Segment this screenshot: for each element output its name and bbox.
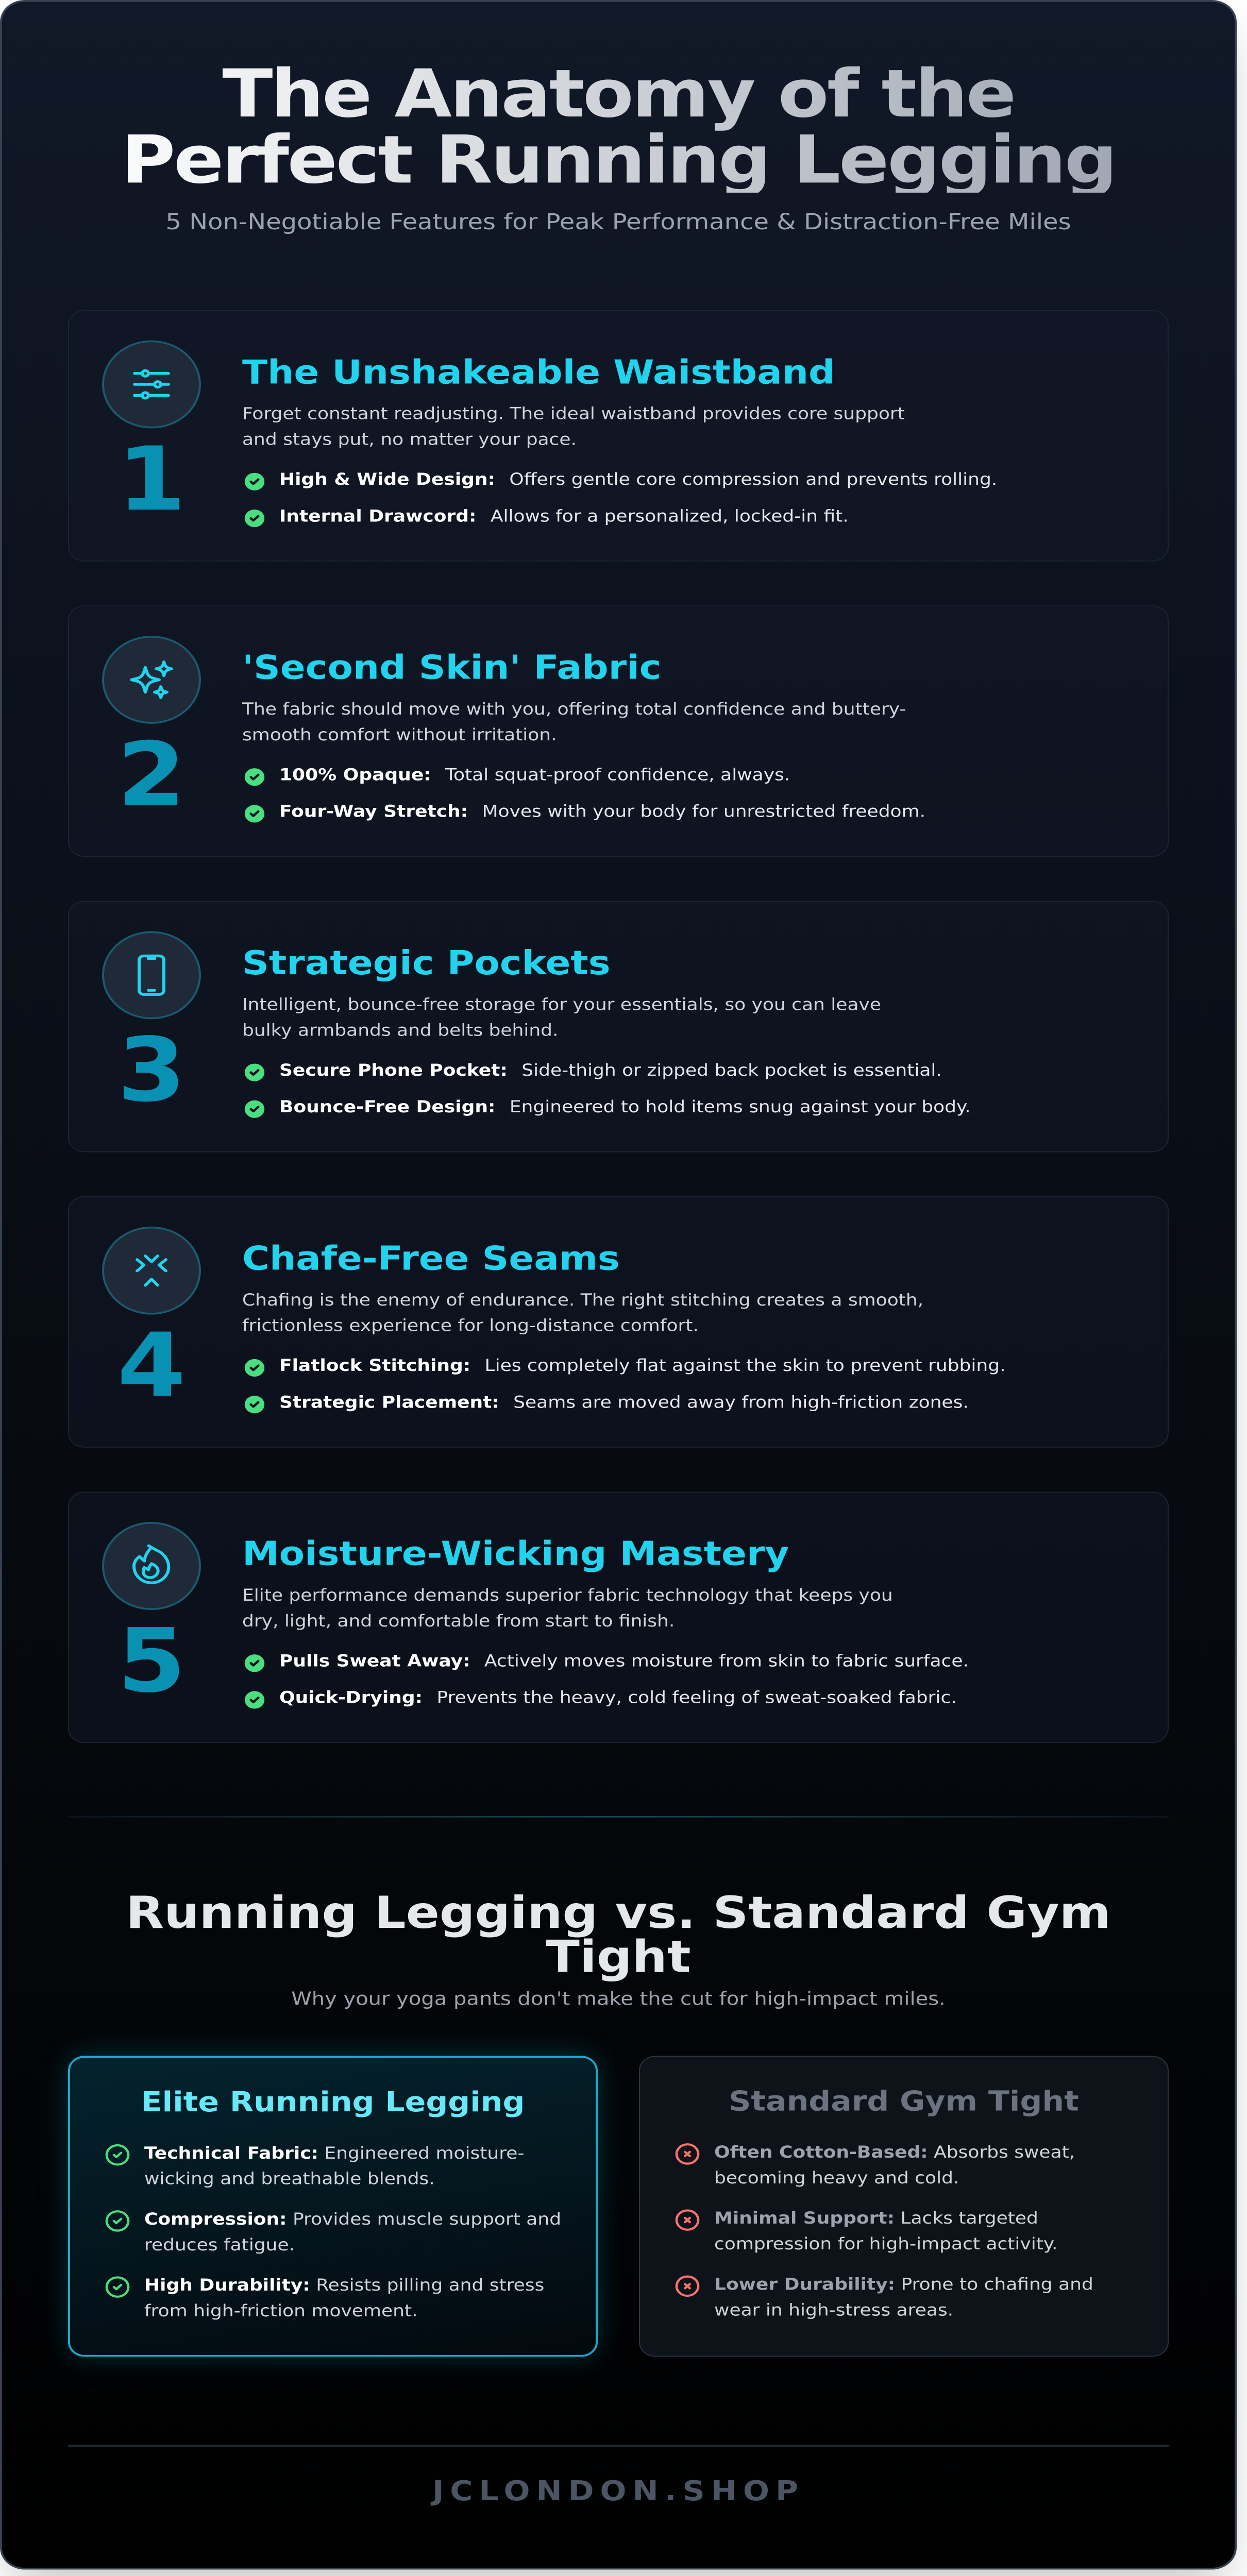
icon: check bbox=[244, 1359, 265, 1377]
heading: The Unshakeable Waistband bbox=[242, 353, 835, 391]
description: and stays put, no matter your pace. bbox=[242, 430, 577, 449]
number 1: 1 bbox=[117, 429, 186, 531]
number 2: 2 bbox=[117, 724, 186, 826]
heading: Strategic Pockets bbox=[242, 943, 611, 982]
description: frictionless experience for long-distance comfort. bbox=[242, 1316, 699, 1335]
panel heading: Standard Gym Tight bbox=[729, 2085, 1079, 2117]
item: technical fabric bbox=[144, 2141, 524, 2192]
icon badge: sparkles bbox=[102, 636, 201, 724]
item: compression bbox=[144, 2207, 561, 2258]
icon badge: inward chevrons bbox=[102, 1227, 201, 1315]
item: high durability: from high-friction movement. bbox=[144, 2302, 418, 2320]
number 5: 5 bbox=[117, 1610, 186, 1713]
number 4: 4 bbox=[117, 1315, 186, 1417]
icon: x outline bbox=[673, 2207, 702, 2233]
bullet: quick-drying: Quick-Drying: Prevents the heavy, cold feeling of sweat-soaked fabric. bbox=[279, 1688, 957, 1707]
description: The fabric should move with you, offering total confidence and buttery- bbox=[242, 700, 906, 719]
icon: check bbox=[244, 805, 265, 822]
comparison heading: Running Legging vs. Standard Gym bbox=[126, 1887, 1111, 1938]
item: minimal support: compression for high-impact activity. bbox=[714, 2235, 1057, 2253]
heading: Chafe-Free Seams bbox=[242, 1239, 620, 1278]
icon badge: sliders bbox=[102, 341, 201, 429]
description: Forget constant readjusting. The ideal waistband provides core support bbox=[242, 404, 905, 423]
description: Chafing is the enemy of endurance. The right stitching creates a smooth, bbox=[242, 1291, 923, 1310]
title: Perfect Running Legging bbox=[121, 121, 1116, 198]
panel: feature 1 waistband bbox=[68, 310, 1169, 562]
bullet: secure phone pocket: Secure Phone Pocket: Side-thigh or zipped back pocket is essential. bbox=[279, 1061, 942, 1080]
description: bulky armbands and belts behind. bbox=[242, 1021, 558, 1040]
panel: standard gym tight bbox=[639, 2056, 1169, 2357]
item: lower durability: Lower Durability: Prone to chafing and bbox=[714, 2275, 1093, 2294]
bullet: opaque: 100% Opaque: Total squat-proof confidence, always. bbox=[279, 766, 790, 784]
panel: feature 2 fabric bbox=[68, 605, 1169, 857]
icon: check bbox=[244, 1100, 265, 1118]
description: Elite performance demands superior fabric technology that keeps you bbox=[242, 1586, 893, 1605]
bullet: flatlock stitching: Flatlock Stitching: Lies completely flat against the skin to prevent rubbing. bbox=[279, 1357, 1006, 1375]
item: minimal support bbox=[714, 2206, 1057, 2257]
icon: x outline bbox=[673, 2273, 702, 2299]
icon: check bbox=[244, 510, 265, 528]
title: The Anatomy of the bbox=[222, 55, 1015, 132]
bullet: pulls sweat away: Pulls Sweat Away: Actively moves moisture from skin to fabric surface. bbox=[279, 1652, 969, 1671]
panel: feature 3 pockets bbox=[68, 901, 1169, 1152]
description: dry, light, and comfortable from start to finish. bbox=[242, 1612, 675, 1631]
number 3: 3 bbox=[117, 1019, 186, 1122]
bullet: four-way stretch: Four-Way Stretch: Moves with your body for unrestricted freedom. bbox=[279, 802, 925, 821]
comparison heading: Tight bbox=[546, 1931, 691, 1982]
item: high durability: High Durability: Resists pilling and stress bbox=[144, 2276, 544, 2295]
heading: Moisture-Wicking Mastery bbox=[242, 1534, 789, 1573]
heading: 'Second Skin' Fabric bbox=[242, 648, 661, 687]
item: technical fabric: Technical Fabric: Engineered moisture- bbox=[144, 2144, 524, 2163]
panel: feature 5 moisture bbox=[68, 1492, 1169, 1743]
icon: check outline bbox=[103, 2142, 132, 2168]
icon: x outline bbox=[673, 2141, 702, 2167]
description: Intelligent, bounce-free storage for your essentials, so you can leave bbox=[242, 995, 881, 1014]
icon: check bbox=[244, 473, 265, 490]
item: cotton-based bbox=[714, 2140, 1075, 2191]
bullet: strategic placement: Strategic Placement: Seams are moved away from high-friction zones. bbox=[279, 1393, 969, 1412]
description bbox=[242, 700, 906, 744]
icon: check bbox=[242, 1394, 267, 1416]
bullet: bounce-free design: Bounce-Free Design: Engineered to hold items snug against your body. bbox=[279, 1098, 971, 1116]
icon: flame bbox=[126, 1543, 177, 1589]
description: smooth comfort without irritation. bbox=[242, 725, 557, 744]
title bbox=[68, 61, 1169, 193]
panel: elite running legging bbox=[68, 2056, 598, 2357]
icon: phone bbox=[138, 954, 165, 996]
comparison subtitle: Why your yoga pants don't make the cut for high-impact miles. bbox=[291, 1989, 946, 2009]
icon: check bbox=[244, 1063, 265, 1081]
icon: check outline bbox=[103, 2274, 132, 2300]
bullet: high and wide design: High & Wide Design: Offers gentle core compression and prevents rolling. bbox=[279, 470, 997, 489]
footer brand: JCLONDON.SHOP bbox=[432, 2475, 804, 2507]
item: compression: Compression: Provides muscle support and bbox=[144, 2210, 561, 2229]
description bbox=[242, 1583, 893, 1634]
item: lower durability bbox=[714, 2272, 1093, 2323]
comparison heading bbox=[68, 1891, 1169, 1979]
panel: feature 4 seams bbox=[68, 1196, 1169, 1448]
item: lower durability: wear in high-stress areas. bbox=[714, 2301, 953, 2319]
subtitle: 5 Non-Negotiable Features for Peak Performance & Distraction-Free Miles bbox=[165, 209, 1071, 235]
description bbox=[242, 404, 905, 449]
item: cotton-based: Often Cotton-Based: Absorbs sweat, bbox=[714, 2143, 1075, 2162]
icon: inward chevrons bbox=[136, 1255, 167, 1287]
item: technical fabric: wicking and breathable blends. bbox=[144, 2170, 435, 2189]
icon: check bbox=[244, 768, 265, 786]
item: compression: reduces fatigue. bbox=[144, 2235, 295, 2255]
icon: sliders bbox=[133, 369, 170, 400]
description bbox=[242, 995, 881, 1040]
icon badge: phone bbox=[102, 931, 201, 1019]
icon: check bbox=[242, 1652, 267, 1674]
icon: sparkles bbox=[130, 660, 173, 699]
item: minimal support: Minimal Support: Lacks targeted bbox=[714, 2209, 1038, 2228]
description bbox=[242, 1291, 923, 1335]
icon: check bbox=[242, 1689, 267, 1711]
item: cotton-based: becoming heavy and cold. bbox=[714, 2168, 959, 2188]
item: high durability bbox=[144, 2273, 544, 2324]
panel heading: Elite Running Legging bbox=[141, 2086, 525, 2118]
bullet: internal drawcord: Internal Drawcord: Allows for a personalized, locked-in fit. bbox=[279, 507, 849, 526]
icon: check outline bbox=[103, 2208, 132, 2234]
icon badge: flame bbox=[102, 1522, 201, 1610]
